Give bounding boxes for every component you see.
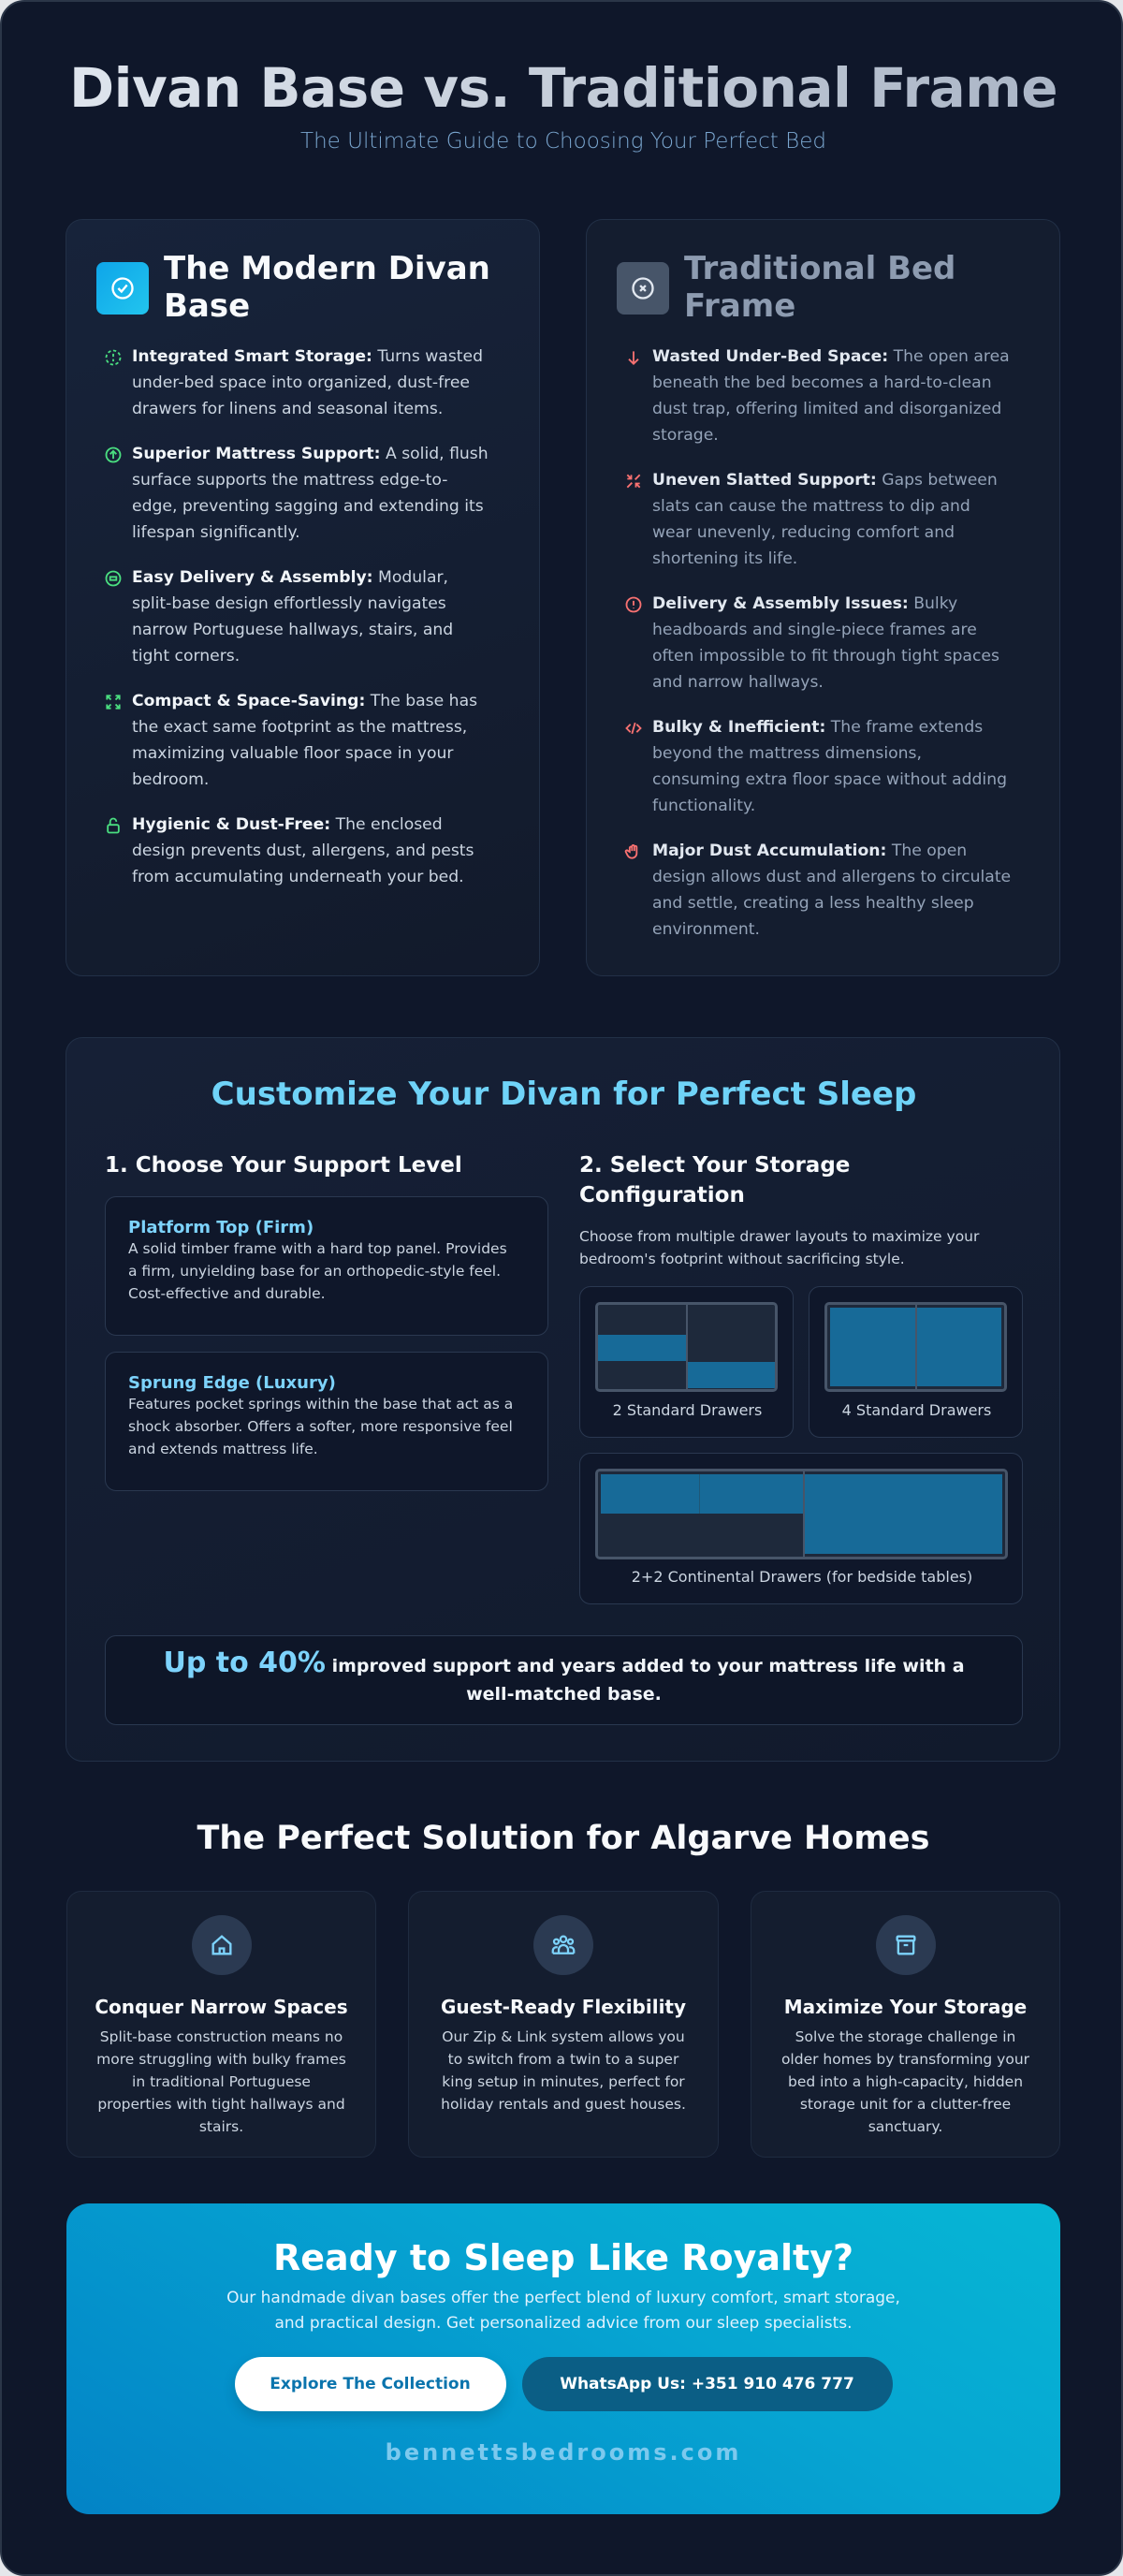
card: sprung edge: and extends mattress life. [128, 1441, 318, 1457]
card: sprung edge: Features pocket springs within the base that act as a [128, 1396, 513, 1412]
benefit list: tight corners. [132, 647, 240, 666]
heading [684, 250, 955, 325]
card: guest ready: holiday rentals and guest houses. [441, 2096, 686, 2113]
subheading: storage: Configuration [579, 1183, 745, 1208]
diagram: continental drawers [579, 1453, 1023, 1604]
card: maximize storage: storage unit for a clutter-free [800, 2096, 1011, 2113]
benefit list: edge, preventing sagging and extending its [132, 497, 484, 516]
benefit list: drawers for linens and seasonal items. [132, 400, 443, 418]
drawback list [625, 347, 1011, 939]
benefit list: design prevents dust, allergens, and pests [132, 842, 474, 860]
buttons: WhatsApp Us: +351 910 476 777 [560, 2375, 854, 2393]
benefit list: narrow Portuguese hallways, stairs, and [132, 621, 453, 639]
panel: customize [66, 1037, 1060, 1762]
card: sprung edge [105, 1352, 548, 1491]
website: bennettsbedrooms.com [386, 2439, 741, 2466]
benefit list [105, 347, 489, 886]
benefit list: lifespan significantly. [132, 523, 300, 542]
drawback list: dust trap, offering limited and disorganized [652, 400, 1001, 418]
panel: modern divan base [66, 219, 540, 976]
benefit list: maximizing valuable floor space in your [132, 744, 453, 763]
drawback list: shortening its life. [652, 549, 797, 568]
card: guest ready: Our Zip & Link system allows you [442, 2028, 685, 2045]
card: platform top: Cost-effective and durable. [128, 1285, 326, 1302]
card: maximize storage: Solve the storage challenge in [795, 2028, 1015, 2045]
card: narrow spaces: Conquer Narrow Spaces [95, 1996, 348, 2018]
section heading: algarve: The Perfect Solution for Algarve Homes [197, 1820, 929, 1857]
CTA heading: Ready to Sleep Like Royalty? [273, 2237, 853, 2278]
subheading: support level: 1. Choose Your Support Level [105, 1153, 462, 1178]
heading: Base [164, 287, 250, 325]
diagram: 2 drawers [579, 1286, 794, 1438]
heading: The Modern Divan [164, 250, 490, 287]
diagram: 2 drawers: 2 Standard Drawers [613, 1401, 762, 1419]
stat callout: Up to 40% improved support and years added to your mattress life with a [163, 1647, 965, 1679]
card: guest ready: Guest-Ready Flexibility [441, 1996, 686, 2018]
drawback list: and narrow hallways. [652, 673, 824, 692]
drawback list: design allows dust and allergens to circulate [652, 868, 1011, 886]
panel: traditional bed frame [586, 219, 1060, 976]
card: maximize storage: Maximize Your Storage [784, 1996, 1027, 2018]
CTA text: Our handmade divan bases offer the perfect blend of luxury comfort, smart storage, [226, 2289, 900, 2307]
drawback list: wear unevenly, reducing comfort and [652, 523, 955, 542]
storage description: Choose from multiple drawer layouts to maximize your [579, 1228, 979, 1245]
benefit list: bedroom. [132, 770, 209, 789]
buttons: Explore The Collection [270, 2375, 471, 2393]
card: maximize storage: sanctuary. [868, 2118, 942, 2135]
card: platform top: A solid timber frame with a hard top panel. Provides [128, 1240, 507, 1257]
benefit list: under-bed space into organized, dust-free [132, 373, 470, 392]
card: narrow spaces: more struggling with bulky frames [96, 2051, 346, 2068]
diagram: continental drawers: 2+2 Continental Drawers (for bedside tables) [632, 1568, 972, 1586]
icon: check [96, 262, 149, 315]
card: guest ready: king setup in minutes, perfect for [442, 2073, 685, 2090]
card: narrow spaces: Split-base construction means no [100, 2028, 343, 2045]
subheading: storage [579, 1153, 850, 1208]
card: sprung edge: Sprung Edge (Luxury) [128, 1373, 336, 1393]
benefit list: Superior Mattress Support: A solid, flush [132, 445, 489, 463]
card: guest ready: to switch from a twin to a super [448, 2051, 678, 2068]
drawback list: beneath the bed becomes a hard-to-clean [652, 373, 992, 392]
heading: Traditional Bed [684, 250, 955, 287]
drawback list: Uneven Slatted Support: Gaps between [652, 471, 998, 490]
card: narrow spaces: properties with tight hallways and [97, 2096, 345, 2113]
card: platform top: a firm, unyielding base for an orthopedic-style feel. [128, 1263, 501, 1280]
subheading: storage: 2. Select Your Storage [579, 1153, 850, 1178]
drawback list: beyond the mattress dimensions, [652, 744, 922, 763]
drawback list: often impossible to fit through tight spaces [652, 647, 999, 666]
icon: group [533, 1915, 593, 1975]
title: Divan Base vs. Traditional Frame [69, 56, 1057, 120]
drawback list: consuming extra floor space without adding [652, 770, 1007, 789]
drawback list: environment. [652, 920, 760, 939]
card: narrow spaces: in traditional Portuguese [132, 2073, 311, 2090]
card: narrow spaces [66, 1891, 376, 2158]
drawback list: Wasted Under-Bed Space: The open area [652, 347, 1010, 366]
drawback list: headboards and single-piece frames are [652, 621, 977, 639]
drawback list: storage. [652, 426, 719, 445]
buttons [232, 2357, 893, 2421]
benefit list: Easy Delivery & Assembly: Modular, [132, 568, 448, 587]
card: maximize storage: older homes by transforming your [781, 2051, 1029, 2068]
section heading: Customize Your Divan for Perfect Sleep [211, 1076, 916, 1113]
CTA text: and practical design. Get personalized advice from our sleep specialists. [274, 2314, 853, 2333]
benefit list: split-base design effortlessly navigates [132, 594, 446, 613]
CTA panel [66, 2203, 1060, 2514]
benefit list: surface supports the mattress edge-to- [132, 471, 447, 490]
storage description: bedroom's footprint without sacrificing style. [579, 1251, 905, 1267]
icon: archive box [876, 1915, 936, 1975]
card: maximize storage [751, 1891, 1060, 2158]
benefit list: Integrated Smart Storage: Turns wasted [132, 347, 483, 366]
icon: house [191, 1915, 251, 1975]
icon: x circle [617, 262, 669, 315]
heading [164, 250, 490, 325]
drawback list: functionality. [652, 797, 755, 815]
benefit list: the exact same footprint as the mattress, [132, 718, 467, 737]
subtitle: The Ultimate Guide to Choosing Your Perfect Bed [300, 129, 826, 154]
storage description [579, 1228, 979, 1267]
drawback list: and settle, creating a less healthy sleep [652, 894, 974, 913]
card: guest ready [408, 1891, 719, 2158]
heading: Frame [684, 287, 795, 325]
card: platform top: Platform Top (Firm) [128, 1218, 314, 1237]
card: maximize storage: bed into a high-capacity, hidden [788, 2073, 1023, 2090]
benefit list: Compact & Space-Saving: The base has [132, 692, 477, 710]
card: sprung edge: shock absorber. Offers a softer, more responsive feel [128, 1418, 513, 1435]
diagram: 4 drawers [809, 1286, 1023, 1438]
card: platform top [105, 1196, 548, 1336]
benefit list: from accumulating underneath your bed. [132, 868, 464, 886]
stat callout [105, 1635, 1023, 1725]
benefit list: Hygienic & Dust-Free: The enclosed [132, 815, 443, 834]
drawback list: Major Dust Accumulation: The open [652, 842, 967, 860]
card: narrow spaces: stairs. [199, 2118, 243, 2135]
drawback list: Delivery & Assembly Issues: Bulky [652, 594, 957, 613]
diagram: 4 drawers: 4 Standard Drawers [842, 1401, 991, 1419]
drawback list: slats can cause the mattress to dip and [652, 497, 970, 516]
drawback list: Bulky & Inefficient: The frame extends [652, 718, 983, 737]
stat callout: well-matched base. [466, 1684, 662, 1705]
CTA text [226, 2289, 900, 2333]
